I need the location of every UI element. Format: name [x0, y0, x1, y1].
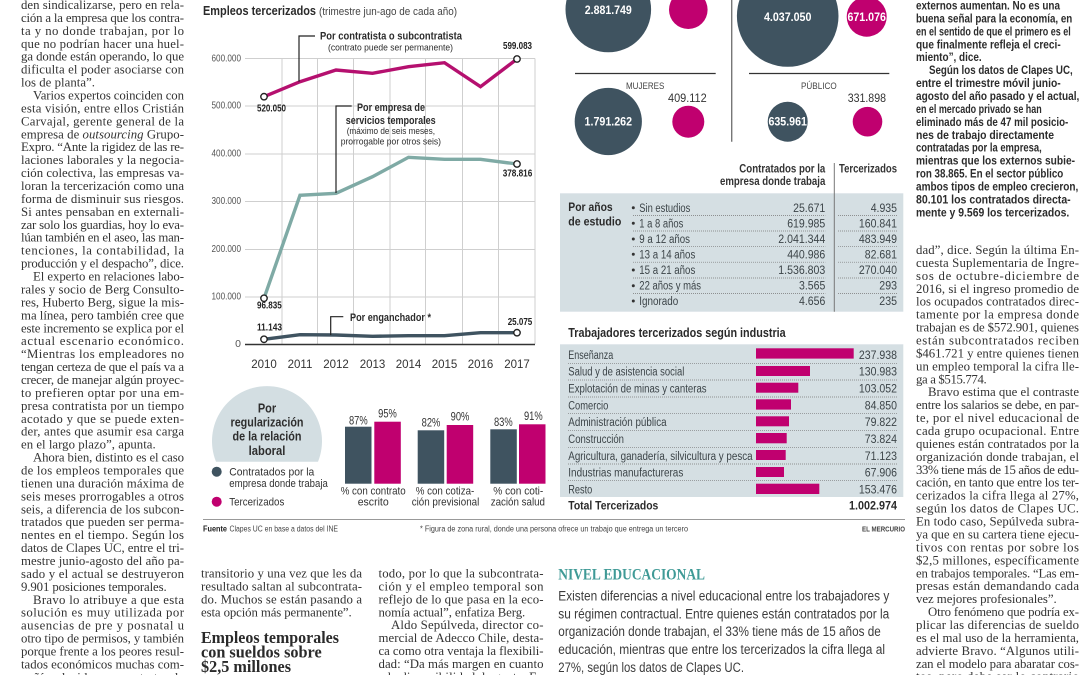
text column 1: Carvajal, gerente general de la	[21, 114, 184, 128]
bar table: trabajadores tercerizados según industria	[560, 326, 903, 512]
series: empresa de servicios temporales	[264, 157, 517, 298]
text column 4: advierte Bravo. “Algunos utili-	[916, 644, 1079, 658]
semicircle heading	[212, 386, 322, 462]
callout heading: NIVEL EDUCACIONAL	[558, 566, 705, 584]
text column 4: $461.721 y entre quienes tienen	[916, 346, 1080, 360]
text column 1: tengan certeza de que el país va a	[21, 360, 184, 374]
bubbles: hombres	[566, 0, 708, 52]
bar group: cotización salud: % con coti-	[493, 486, 544, 498]
row labels: Sin estudios	[639, 203, 690, 215]
text column 1: loran la tercerización como una	[21, 179, 184, 193]
column: contratados: 4.656	[799, 296, 825, 308]
panel: bubble comparison	[566, 0, 889, 155]
text column 1	[21, 0, 185, 675]
text column 1: der, antes que asumir esa carga	[21, 425, 184, 439]
row heading	[568, 200, 621, 228]
text column 1: que no podrían hacer una huel-	[21, 37, 184, 51]
row labels: 1 a 8 años	[639, 218, 683, 230]
x axis years: 2017	[504, 359, 530, 371]
panel: regularización de la relación laboral	[212, 386, 545, 508]
text column 1: laciones laborales y la negocia-	[21, 153, 184, 167]
text column 1: acotado y que se puede exten-	[21, 412, 184, 426]
bar group: cotización previsional: 82%	[422, 418, 440, 430]
industry values: 84.850	[865, 400, 897, 412]
text column 3: Aldo Sepúlveda, director co-	[391, 618, 544, 632]
text column 1: datos de Clapes UC, entre el tri-	[21, 541, 184, 555]
bar group: contrato escrito	[341, 409, 406, 508]
x axis years: 2013	[360, 359, 385, 371]
text column 1: tados económicos muchas com-	[21, 657, 184, 671]
text column 1: ga donde están operando, lo que	[21, 50, 184, 64]
legend: empresa donde trabaja	[229, 478, 329, 490]
footer: source and note: Clapes UC en base a datos del INE	[230, 524, 338, 534]
text column 4: tivos con rentas por sobre los	[916, 540, 1079, 554]
text column 1: res, Huberto Berg, sigue la mis-	[21, 295, 184, 309]
series labels: (contrato puede ser permanente)	[328, 42, 453, 54]
text column 4: quienes están contratados por la	[916, 437, 1079, 451]
industry values: 79.822	[865, 417, 897, 429]
text column 4: están subcontratados reciben	[916, 334, 1080, 348]
column: contratados: 2.041.344	[778, 234, 826, 246]
industry values: 103.052	[859, 384, 897, 396]
text column 1: ausencias de pre y posnatal u	[21, 619, 185, 633]
text column 2	[201, 566, 362, 619]
table: por años de estudio	[560, 163, 903, 312]
text column: bold sidebar: miento”, dice.	[916, 50, 982, 64]
text column: bold sidebar: en el mercado privado se han	[916, 102, 1042, 116]
semicircle heading: laboral	[249, 443, 285, 458]
text column 1: tenciones, la contabilidad, la	[21, 244, 184, 258]
series labels: Por enganchador *	[350, 312, 432, 324]
text column 1: porque frente a los peores resul-	[21, 644, 184, 658]
data labels: 599.083	[503, 41, 532, 52]
legend	[212, 466, 329, 508]
text column 1: “Mientras los empleadores no	[21, 347, 184, 361]
leader lines	[299, 36, 352, 335]
industry values	[859, 350, 898, 496]
text column 1: 9.901 posiciones temporales.	[21, 580, 167, 594]
industry values: 71.123	[865, 451, 897, 463]
text column 4: según los datos de Clapes UC.	[916, 502, 1079, 516]
bubbles: público: 635.961	[768, 114, 807, 128]
text column 3: nomía actual”, enfatiza Berg.	[378, 605, 525, 619]
text column 1: zar solo los guardias, hoy lo eva-	[21, 218, 184, 232]
industry labels: Explotación de minas y canteras	[568, 384, 707, 396]
text column 4: Bravo estima que el contraste	[928, 385, 1079, 399]
text column 4: 2016, si el ingreso promedio de	[916, 282, 1079, 296]
footer: source and note: EL MERCURIO	[862, 526, 905, 534]
text column: bold sidebar	[916, 0, 1079, 219]
industry labels: Enseñanza	[568, 350, 614, 362]
text column 1: ta y no donde trabajan, por lo	[21, 24, 184, 38]
column: contratados: 25.671	[793, 203, 825, 215]
column: tercerizados: 235	[879, 296, 897, 308]
legend: Tercerizados	[229, 496, 285, 508]
text column 3: reflejo de lo que pasa en la eco-	[378, 592, 544, 606]
bubbles: privado	[737, 0, 887, 67]
text column 1: rales y socio de Berg Consulto-	[21, 282, 184, 296]
semicircle heading: de la relación	[232, 429, 302, 444]
text column 2: esta opción más permanente”.	[201, 605, 352, 619]
footer: source and note: Fuente	[203, 524, 227, 534]
text column: bold sidebar: entre el trimestre móvil junio-	[916, 76, 1061, 90]
subheading: empleos temporales	[201, 628, 340, 675]
text column 2: do. Muchos se están pasando a	[201, 592, 362, 606]
column: contratados: 619.985	[787, 218, 825, 230]
bubbles: público	[768, 81, 886, 142]
x axis years: 2016	[468, 359, 493, 371]
heading: Trabajadores tercerizados según industria	[568, 326, 787, 340]
industry labels	[568, 350, 753, 496]
bubbles: mujeres	[575, 81, 707, 155]
text column 1: presa contratista por un tiempo	[21, 399, 184, 413]
column: contratados: 3.565	[799, 280, 825, 292]
text column 4: dad”, dice. Según la última En-	[916, 243, 1079, 257]
text column 4: en trabajos temporales. “Las em-	[916, 566, 1079, 580]
text column 1: este incremento se explica por el	[21, 321, 184, 335]
text column 1: sado y el actual se destruyeron	[21, 567, 185, 581]
bubbles: público: 331.898	[848, 93, 886, 105]
text column 1: mestre junio-agosto del año pa-	[21, 554, 184, 568]
row heading: de estudio	[568, 214, 621, 228]
y axis labels: 300.000	[212, 195, 241, 207]
x axis years: 2014	[396, 359, 422, 371]
x axis years: 2015	[432, 359, 457, 371]
text column 1: producción y el despacho”, dice.	[21, 257, 184, 271]
row heading: Por años	[568, 200, 613, 214]
callout body: 27%, según los datos de Clapes UC.	[558, 660, 744, 675]
text column 1: nentes en el tiempo. Según los	[21, 528, 184, 542]
text column 4: presas están demandando cada	[916, 579, 1079, 593]
bubbles: mujeres: 1.791.262	[585, 114, 632, 128]
bar group: cotización previsional: ción previsional	[412, 496, 479, 508]
text column 1: seis meses prorrogables a otros	[21, 489, 184, 503]
text column 4: entre los salarios se debe, en par-	[916, 398, 1079, 412]
x axis years	[251, 359, 530, 371]
total row: 1.002.974	[849, 500, 898, 512]
y axis labels: 100.000	[212, 290, 241, 302]
y axis labels: 500.000	[212, 100, 241, 112]
series labels: Por contratista o subcontratista	[320, 30, 463, 42]
text column 1: otro tipo de permisos, y también	[21, 632, 185, 646]
total row: Total Tercerizados	[568, 500, 658, 512]
series labels: (máximo de seis meses,	[347, 126, 435, 137]
text column 1: to prefieren optar por una em-	[21, 386, 184, 400]
row labels: 15 a 21 años	[639, 265, 695, 277]
text column 4: En todo caso, Sepúlveda subra-	[916, 514, 1079, 528]
column: tercerizados: 483.949	[859, 234, 897, 246]
industry values: 73.824	[865, 434, 898, 446]
industry values: 67.906	[865, 468, 897, 480]
bar group: cotización salud	[490, 411, 546, 508]
industry labels: Salud y de asistencia social	[568, 367, 684, 379]
row labels: 13 a 14 años	[639, 250, 695, 262]
text column 4: sos de octubre-diciembre de	[916, 269, 1079, 283]
bubbles: mujeres: MUJERES	[626, 81, 664, 92]
text column 4: cuesta Suplementaria de Ingre-	[916, 256, 1079, 270]
series: enganchador	[264, 333, 517, 339]
bar group: cotización salud: 91%	[524, 411, 543, 423]
series labels: servicios temporales	[346, 115, 436, 127]
bubbles: mujeres: 409.112	[668, 93, 707, 105]
column: tercerizados: 293	[879, 280, 897, 292]
column: contratados: 1.536.803	[778, 265, 825, 277]
text column 1: tratados que pueden ser perma-	[21, 515, 184, 529]
text column 1: Si antes pensaban en externali-	[21, 205, 184, 219]
industry labels: Comercio	[568, 400, 608, 412]
text column 4: cada grupo ocupacional. Entre	[916, 424, 1079, 438]
text column 2: transitorio y una vez que les da	[201, 566, 362, 580]
column: contratados: 440.986	[787, 250, 825, 262]
text column 4	[916, 243, 1080, 675]
text column 1: Ahora bien, distinto es el caso	[33, 451, 184, 465]
text column 4: cerizados la cifra llega al 27%,	[916, 489, 1079, 503]
bar group: cotización previsional: 90%	[451, 412, 469, 424]
data labels: 520.050	[257, 104, 286, 115]
horizontal bars	[756, 348, 854, 494]
legend: Contratados por la	[229, 466, 315, 478]
column: tercerizados: 160.841	[859, 218, 897, 230]
industry labels: Resto	[568, 484, 592, 496]
bar group: contrato escrito: escrito	[358, 496, 389, 508]
semicircle heading: regularización	[230, 414, 304, 430]
table column headers: Contratados por la	[739, 164, 826, 176]
industry values: 153.476	[859, 484, 897, 496]
text column 1: forma de disminuir sus riesgos.	[21, 192, 184, 206]
chart title: (trimestre jun-ago de cada año)	[319, 6, 457, 18]
text column 1: en el largo plazo”, apunta.	[21, 438, 156, 452]
callout body: su régimen contractual. Entre quienes están contratados por la	[558, 606, 890, 621]
text column 4: ya que en su cartera tiene ejecu-	[916, 528, 1079, 542]
text column 4: organización donde trabajan, el	[916, 450, 1079, 464]
industry values: 130.983	[859, 367, 897, 379]
row labels	[639, 203, 701, 308]
bar group: cotización salud: zación salud	[491, 496, 545, 508]
text column 1: solución es muy utilizada por	[21, 606, 185, 620]
row labels: Ignorado	[639, 296, 678, 308]
text column 4: te, por el nivel educacional de	[916, 411, 1079, 425]
chart title	[203, 4, 457, 18]
text column 4: vez mejores profesionales”.	[916, 592, 1057, 606]
text column 1: empresa de outsourcing Grupo-	[21, 127, 184, 141]
text column 1: esta visión, entre ellos Cristián	[21, 101, 185, 115]
bubbles: hombres: 2.881.749	[585, 3, 632, 17]
x axis years: 2011	[288, 359, 312, 371]
y axis labels: 0	[235, 338, 241, 350]
industry labels: Construcción	[568, 434, 624, 446]
footer: source and note	[203, 520, 905, 534]
data labels	[257, 41, 533, 334]
industry labels: Administración pública	[568, 417, 667, 429]
text column 4: 33% tiene más de 15 años de edu-	[916, 463, 1079, 477]
callout: nivel educacional	[558, 566, 890, 675]
text column 4: los ocupados contratados direc-	[916, 295, 1079, 309]
column: tercerizados: 4.935	[871, 203, 897, 215]
bar group: contrato escrito: % con contrato	[341, 486, 406, 498]
callout body	[558, 588, 890, 675]
text column 1: ma línea, pero también cree que	[21, 308, 184, 322]
data labels: 11.143	[257, 323, 282, 334]
footer: source and note: * Figura de zona rural, donde una persona ofrece un trabajo que entrega un tercero	[420, 524, 688, 534]
subheading: empleos temporales: Empleos temporales	[201, 628, 340, 647]
industry labels: Agricultura, ganadería, silvicultura y pesca	[568, 451, 753, 463]
series end markers	[261, 56, 520, 342]
column: tercerizados: 270.040	[859, 265, 897, 277]
text column 1: Bravo lo atribuye a que esta	[33, 593, 184, 607]
text column 1: crecer, de manejar algún proyec-	[21, 373, 184, 387]
text column 3: dad: “Da más margen en cuanto	[378, 657, 544, 671]
y axis labels: 600.000	[212, 52, 241, 64]
bullets	[632, 206, 635, 302]
text column 1: actual escenario económico.	[21, 334, 184, 348]
callout body: Existen diferencias a nivel educacional entre los trabajadores y	[558, 588, 890, 604]
callout body: educación, mientras que entre los tercerizados la cifra llega al	[558, 642, 885, 657]
text column 3: ción y el empleo temporal son	[378, 580, 544, 594]
table column headers	[720, 164, 897, 188]
data labels: 96.835	[257, 300, 282, 311]
text column 1: seis, a diferencia de los subcon-	[21, 502, 184, 516]
bubbles: privado: 4.037.050	[764, 10, 812, 24]
bar group: cotización salud: 83%	[494, 417, 513, 429]
bar group: cotización previsional	[412, 412, 479, 508]
y axis labels: 200.000	[212, 243, 241, 255]
x axis years: 2012	[323, 359, 349, 371]
text column 1: de los empleos temporales que	[21, 464, 184, 478]
series labels: Por empresa de	[357, 102, 425, 114]
y axis labels: 400.000	[212, 148, 241, 160]
text column 3: ca como otra ventaja la flexibili-	[378, 644, 544, 658]
text column 4: plicar las diferencias de sueldo	[916, 618, 1079, 632]
series labels: prorrogable por otros seis)	[341, 137, 441, 148]
text column 1: Expro. “Ante la rigidez de las re-	[21, 140, 184, 154]
text column 3	[378, 566, 544, 675]
text column 4: trabajan es de $572.901, quienes	[916, 321, 1079, 335]
industry labels: Industrias manufactureras	[568, 468, 684, 480]
column: contratados	[778, 203, 826, 308]
chart title: Empleos tercerizados	[203, 4, 316, 18]
bar group: contrato escrito: 87%	[349, 415, 368, 427]
line chart: empleos tercerizados	[203, 4, 535, 371]
text column 4: Otro fenómeno que podría ex-	[928, 605, 1079, 619]
total row	[568, 500, 898, 512]
semicircle heading: Por	[258, 401, 276, 416]
text column 1: El experto en relaciones labo-	[33, 270, 184, 284]
column: tercerizados	[859, 203, 897, 308]
x axis years: 2010	[251, 359, 277, 371]
series labels	[320, 30, 463, 324]
data labels: 378.816	[503, 168, 533, 179]
table column headers: Tercerizados	[839, 164, 897, 176]
text column 4: es el mal uso de la herramienta,	[916, 631, 1079, 645]
bubbles: privado: 671.076	[847, 10, 886, 24]
subheading: empleos temporales: con sueldos sobre	[201, 642, 322, 662]
bar group: contrato escrito: 95%	[378, 409, 397, 421]
text column 1: tienen una duración máxima de	[21, 476, 184, 490]
text column 1: ción colectiva, las empresas va-	[21, 166, 184, 180]
text column 4: tamente por la empresa donde	[916, 308, 1079, 322]
text column 4: zan el modelo para abaratar cos-	[916, 657, 1079, 671]
column: tercerizados: 82.681	[865, 250, 897, 262]
bar group: cotización previsional: % con cotiza-	[416, 486, 475, 498]
text column 1: ción a la empresa que los contra-	[21, 11, 184, 25]
data labels: 25.075	[508, 317, 533, 328]
text column 2: resultado saltan al subcontrata-	[201, 580, 362, 594]
text column 4: un empleo temporal la cifra lle-	[916, 359, 1079, 373]
bubbles: público: PÚBLICO	[801, 81, 837, 92]
text column 4: ga a $515.774.	[916, 372, 987, 386]
text column 1: los de planta”.	[21, 76, 95, 90]
text column: bold sidebar: contratadas por la empresa,	[916, 141, 1042, 155]
text column 3: todo, por lo que la subcontrata-	[378, 566, 544, 580]
text column: bold sidebar: nes de trabajo directamente	[916, 128, 1054, 142]
text column 1: dificulta el poder asociarse con	[21, 63, 185, 77]
text column 1: lúan también en el aseo, las man-	[21, 231, 184, 245]
table column headers: empresa donde trabaja	[720, 176, 826, 188]
y axis labels	[212, 52, 241, 350]
callout body: organización donde trabajan, el 33% tiene más de 15 años de	[558, 624, 881, 639]
text column 3: mercial de Adecco Chile, desta-	[378, 631, 544, 645]
text column 4: $2,5 millones, específicamente	[916, 553, 1079, 567]
row labels: 22 años y más	[639, 280, 701, 292]
row labels: 9 a 12 años	[639, 234, 690, 246]
text column 4: cación, en tanto que entre los ter-	[916, 476, 1079, 490]
series: contratista o subcontratista	[264, 59, 517, 97]
industry values: 237.938	[859, 350, 897, 362]
text column 1: Varios expertos coinciden con	[33, 88, 185, 102]
